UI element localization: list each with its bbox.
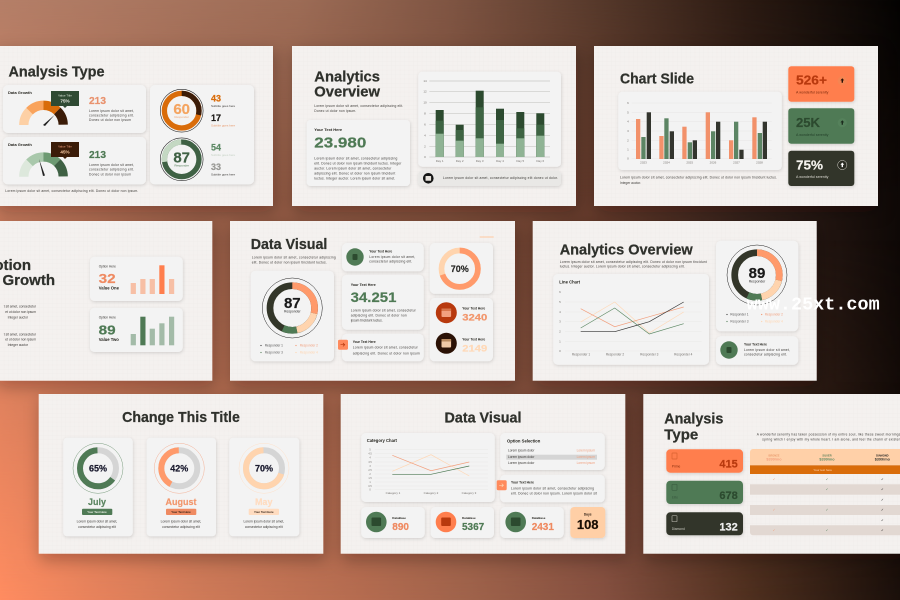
text: intro: Donec ut dolor non ipsum. bbox=[314, 109, 356, 113]
table: pricing comparison: ✓ bbox=[881, 518, 884, 522]
text: chart note bbox=[620, 176, 777, 185]
line chart: four responders: 2 bbox=[559, 330, 561, 334]
stat card: 526+: 526+ bbox=[796, 73, 827, 88]
stat card: Elite 678 bbox=[666, 481, 743, 504]
stat card: 75% bbox=[788, 151, 854, 186]
watermark: www.25xt.com: www.25xt.com bbox=[747, 296, 880, 316]
bar chart: yearly grouped bars: 2024 bbox=[663, 161, 670, 165]
card: 70% donut bbox=[430, 243, 493, 294]
card: July 65%: Your Text Here bbox=[87, 510, 107, 514]
card: option selection table: Lorem ipsum dolor bbox=[508, 461, 535, 465]
bar chart: yearly grouped bars: 2023 bbox=[640, 161, 647, 165]
text: intro: Lorem ipsum dolor sit amet, consectetur adipiscing elit. Donec ut dolor non ipsum tincidunt bbox=[560, 260, 707, 264]
table: pricing comparison: $399/mo bbox=[875, 458, 891, 462]
table: pricing comparison: ✓ bbox=[826, 508, 829, 512]
table: pricing comparison: Your text here bbox=[813, 468, 832, 472]
card: option selection table: Lorem ipsum bbox=[577, 449, 595, 453]
stat card: Diamond 132 bbox=[666, 512, 743, 535]
card: database 5367: DataBase bbox=[462, 516, 476, 520]
card: top text with person icon: consectetur adipiscing elit. bbox=[369, 260, 412, 264]
table: pricing comparison: ✓ bbox=[881, 528, 884, 532]
card: value two bars: Option Here bbox=[99, 316, 116, 320]
card: bottom text with arrow: Your Text Here bbox=[353, 340, 376, 344]
card: 87 responder donut: Responder 4 bbox=[300, 350, 318, 354]
line chart: four responders: 1 bbox=[559, 339, 561, 343]
card: gauge two: Lorem ipsum dolor sit amet, bbox=[89, 163, 134, 167]
card: value two bars: Value Two bbox=[99, 337, 119, 342]
card: responder donuts: Subtitle goes here bbox=[211, 124, 236, 128]
card: text with person icon: Your Text Here bbox=[744, 342, 767, 346]
card: database 890: DataBase bbox=[392, 516, 406, 520]
card: 23.980 stat bbox=[307, 120, 410, 186]
card: 87 responder donut: Responder bbox=[284, 310, 301, 314]
card: responder donuts: 54 bbox=[211, 143, 221, 153]
bar chart: daily stacked bars: 14 bbox=[423, 79, 427, 83]
panel: Chart Slide bbox=[594, 46, 878, 206]
card: gauge one: Data Growth bbox=[8, 90, 32, 95]
card: option selection table: Lorem ipsum bbox=[577, 455, 595, 459]
card: gauge one: 213 bbox=[89, 96, 106, 107]
text: footnote: Lorem ipsum dolor sit amet, consectetur adipiscing elit. Donec ut dolor non ipsum. bbox=[5, 189, 138, 193]
table: pricing comparison: ✓ bbox=[773, 528, 776, 532]
card: May 70%: May bbox=[255, 497, 272, 507]
callout: chart note strip: Lorem ipsum dolor sit amet, consectetur adipiscing elit donec ut dolor. bbox=[443, 176, 558, 180]
card: bottom text with arrow bbox=[338, 334, 424, 361]
card: responder donuts: 87 bbox=[173, 150, 190, 166]
title: Data Visual: Data Visual bbox=[251, 236, 327, 253]
stat card: 75%: 75% bbox=[796, 157, 823, 172]
bar chart: daily stacked bars: Day 3 bbox=[476, 159, 484, 163]
card: responder donuts: Subtitle goes here bbox=[211, 172, 236, 176]
accent line bbox=[480, 236, 494, 238]
card: May 70%: consectetur adipiscing elit bbox=[245, 525, 283, 529]
card: value one bars: Option Here bbox=[99, 265, 116, 269]
card: 70% donut: 70% bbox=[451, 264, 469, 274]
card: 34.251 stat: 34.251 bbox=[351, 290, 397, 305]
stat card: 25K: 25K bbox=[796, 115, 821, 130]
line chart: category chart: 4.5 bbox=[368, 453, 372, 456]
card: option selection table: Option Selection bbox=[507, 438, 541, 443]
card: gauge two: Data Growth bbox=[8, 142, 32, 147]
card: 89 responder donut: Responder 2 bbox=[765, 312, 783, 316]
title: Change This Title: Change This Title bbox=[122, 409, 240, 426]
line chart: category chart: 0.5 bbox=[368, 485, 372, 488]
card: database 2431 bbox=[500, 507, 564, 538]
text: description two bbox=[4, 332, 37, 347]
line chart: four responders: 3 bbox=[559, 320, 561, 324]
table: pricing comparison: ✓ bbox=[826, 488, 829, 492]
bar chart: daily stacked bars bbox=[418, 72, 561, 167]
card: 34.251 stat: adipiscing elit. Donec ut dolor non bbox=[351, 313, 407, 317]
card: text with person icon bbox=[716, 336, 798, 365]
stat card: 25K bbox=[788, 108, 854, 144]
line chart: category chart: Category 1 bbox=[386, 491, 401, 495]
bar chart: daily stacked bars: 6 bbox=[424, 123, 426, 127]
card: 34.251 stat: Your Text Here bbox=[351, 283, 376, 287]
card: database 5367 bbox=[431, 507, 494, 538]
card: 3240 and 2149 stats: 3240 bbox=[462, 312, 487, 323]
title: Analysis Type: Type bbox=[664, 426, 698, 443]
card: 3240 and 2149 stats: 2149 bbox=[462, 343, 487, 354]
card: 3240 and 2149 stats: Your Text Here bbox=[462, 337, 485, 341]
panel: Data Visual slide with category chart bbox=[341, 394, 625, 554]
card: 108 days: Days bbox=[584, 513, 592, 517]
line chart: category chart: 2 bbox=[369, 473, 371, 476]
text: intro: Lorem ipsum dolor sit amet, consectetur adipiscing bbox=[252, 256, 336, 260]
bar chart: daily stacked bars: 8 bbox=[424, 111, 426, 115]
stat card: 25K: A wonderful serenity bbox=[796, 133, 829, 137]
card: 87 responder donut: Responder 3 bbox=[265, 350, 283, 354]
line chart: category chart: 5 bbox=[369, 448, 371, 452]
table: pricing comparison: ✓ bbox=[881, 488, 884, 492]
card: 23.980 stat: luctus. Integer auctor. Lorem ipsum dolor sit amet. bbox=[314, 176, 395, 180]
card: text with person icon: Lorem ipsum dolor sit amet, bbox=[744, 348, 790, 352]
bar chart: daily stacked bars: Day 1 bbox=[436, 159, 444, 163]
bar chart: yearly grouped bars: 2 bbox=[627, 138, 629, 142]
title: Analysis Type: Analysis bbox=[664, 411, 723, 428]
line chart: category chart bbox=[361, 433, 495, 502]
table: pricing comparison: BRONZE bbox=[769, 453, 780, 457]
line chart: four responders: 4 bbox=[559, 310, 561, 314]
card: gauge one: 75% bbox=[60, 98, 70, 104]
card: 89 responder donut bbox=[716, 241, 798, 331]
panel: Change This Title slide bbox=[39, 394, 323, 554]
text: intro bbox=[252, 256, 336, 265]
panel: Analytics Overview slide with stacked bars bbox=[292, 46, 576, 206]
card: May 70%: Lorem ipsum dolor sit amet, bbox=[243, 520, 284, 524]
card: responder donuts: 60 bbox=[173, 101, 190, 118]
card: text with person icon: consectetur adipiscing elit. bbox=[744, 353, 787, 357]
card: gauge one: Value Title bbox=[58, 94, 72, 98]
card: August 42%: Your Text Here bbox=[171, 510, 191, 514]
table: pricing comparison: SILVER bbox=[822, 453, 832, 457]
card: 89 responder donut: Responder 3 bbox=[730, 320, 749, 324]
card: gauge one: Donec ut dolor non ipsum bbox=[89, 118, 131, 122]
card: July 65%: Lorem ipsum dolor sit amet, bbox=[77, 520, 117, 524]
card: May 70%: 70% bbox=[255, 464, 273, 474]
title: Analytics Overview: Analytics Overview bbox=[560, 241, 693, 258]
line chart: four responders: Line Chart bbox=[559, 280, 581, 285]
bar chart: daily stacked bars: Day 4 bbox=[496, 159, 504, 163]
text: description one: t sit amet, consectetur bbox=[4, 305, 37, 309]
bar chart: yearly grouped bars: 4 bbox=[627, 120, 629, 124]
card: 23.980 stat: Lorem ipsum dolor sit amet, consectetur adipiscing bbox=[314, 157, 397, 161]
card: text with arrow: Lorem ipsum dolor sit amet, consectetur adipiscing bbox=[511, 487, 594, 491]
card: value two bars: 89 bbox=[99, 322, 116, 337]
bar chart: yearly grouped bars: 0 bbox=[627, 157, 629, 161]
card: responder donuts bbox=[150, 85, 254, 184]
card: gauge one: consectetur adipiscing elit. bbox=[89, 114, 134, 118]
bar chart: daily stacked bars: 2 bbox=[424, 144, 426, 148]
card: gauge one bbox=[3, 85, 146, 145]
card: August 42%: August bbox=[166, 497, 196, 507]
title: Analysis Type bbox=[664, 411, 723, 443]
card: July 65%: 65% bbox=[89, 464, 107, 474]
title: Analytics Overview bbox=[314, 68, 380, 101]
card: gauge one: Lorem ipsum dolor sit amet, bbox=[89, 109, 134, 113]
card: responder donuts: Responder bbox=[174, 115, 189, 119]
card: 23.980 stat: adipiscing elit. Donec ut dolor non ipsum tincidunt bbox=[314, 171, 395, 175]
line chart: category chart: 1 bbox=[369, 481, 371, 484]
bar chart: daily stacked bars: Day 6 bbox=[536, 159, 545, 163]
card: July 65%: July bbox=[88, 497, 106, 507]
text: intro: Lorem ipsum dolor sit amet, consectetur adipiscing elit. bbox=[314, 104, 403, 108]
card: 89 responder donut: Responder 1 bbox=[730, 312, 749, 316]
text: description one: et ut dolor non ipsum bbox=[5, 310, 36, 314]
panel: Data Visual slide bbox=[230, 221, 515, 381]
card: responder donuts: 33 bbox=[211, 162, 221, 172]
card: July 65%: consectetur adipiscing elit bbox=[78, 525, 116, 529]
bar chart: daily stacked bars: 12 bbox=[423, 90, 427, 94]
line chart: four responders: 0 bbox=[559, 349, 561, 353]
card: gauge two: 213 bbox=[89, 150, 106, 161]
table: pricing comparison: ✓ bbox=[773, 508, 776, 512]
line chart: category chart: 1.5 bbox=[368, 477, 372, 480]
stat card: Prime 415: Prime bbox=[672, 464, 680, 468]
card: gauge two: Donec ut dolor non ipsum bbox=[89, 172, 131, 176]
title: Analysis Type: Analysis Type bbox=[8, 64, 104, 80]
text: description two: et ut dolor non ipsum bbox=[5, 338, 36, 342]
card: text with arrow: elit. Donec ut dolor non ipsum. Lorem ipsum dolor sit bbox=[511, 492, 597, 496]
card: top text with person icon: Lorem ipsum dolor sit amet, bbox=[369, 255, 415, 259]
table: pricing comparison: ✓ bbox=[881, 478, 884, 482]
bar chart: yearly grouped bars: 3 bbox=[627, 129, 629, 133]
line chart: four responders: 6 bbox=[559, 290, 561, 294]
card: responder donuts: Responder bbox=[174, 164, 189, 168]
card: value two bars bbox=[90, 308, 183, 352]
card: 23.980 stat: 23.980 bbox=[314, 134, 366, 151]
line chart: four responders: 5 bbox=[559, 300, 561, 304]
title: Promotion Product Growth bbox=[0, 257, 55, 289]
stat card: 526+ bbox=[788, 66, 854, 102]
card: August 42%: 42% bbox=[170, 464, 188, 474]
card: database 2431: 2431 bbox=[532, 522, 554, 533]
bar chart: daily stacked bars: 10 bbox=[423, 100, 427, 104]
card: 87 responder donut: Responder 1 bbox=[265, 344, 283, 348]
line chart: four responders: Responder 3 bbox=[640, 352, 659, 356]
card: May 70% bbox=[229, 438, 299, 536]
table: pricing comparison: DIAMOND bbox=[876, 453, 889, 457]
card: bottom text with arrow: Lorem ipsum dolor sit amet, consectetur bbox=[353, 346, 419, 350]
title: Data Visual: Data Visual bbox=[444, 410, 522, 427]
card: value one bars: 32 bbox=[99, 271, 116, 286]
text: intro: elit. Donec ut dolor non ipsum tincidunt luctus. bbox=[252, 261, 327, 265]
card: gauge two bbox=[3, 137, 146, 196]
bar chart: yearly grouped bars: 2028 bbox=[756, 161, 763, 165]
card: responder donuts: 17 bbox=[211, 113, 221, 123]
line chart: category chart: Category Chart bbox=[367, 438, 398, 443]
card: gauge two: consectetur adipiscing elit. bbox=[89, 168, 134, 172]
card: 23.980 stat: Your Text Here bbox=[314, 127, 343, 132]
line chart: category chart: 3.5 bbox=[368, 461, 372, 464]
card: 108 days: 108 bbox=[577, 517, 599, 532]
bar chart: yearly grouped bars: 5 bbox=[627, 110, 629, 114]
card: 87 responder donut: 87 bbox=[284, 295, 301, 312]
card: 34.251 stat: ipsum tincidunt luctus. bbox=[351, 318, 383, 322]
text: intro: luctus. Integer auctor. Lorem ipsum dolor sit amet, consectetur adipiscing elit. bbox=[560, 265, 685, 269]
card: 3240 and 2149 stats: Your Text Here bbox=[462, 307, 485, 311]
table: pricing comparison: ✓ bbox=[773, 478, 776, 482]
card: August 42%: consectetur adipiscing elit bbox=[162, 525, 200, 529]
line chart: four responders bbox=[553, 274, 709, 365]
panel: Analysis Type slide bbox=[0, 46, 273, 206]
card: responder donuts: Subtitle goes here bbox=[211, 153, 236, 157]
card: 87 responder donut bbox=[251, 271, 334, 361]
title: Analytics Overview: Overview bbox=[314, 84, 380, 101]
table: pricing comparison: ✓ bbox=[881, 498, 884, 502]
panel: Analysis Type slide with pricing table bbox=[643, 394, 900, 554]
bar chart: daily stacked bars: Day 5 bbox=[516, 159, 525, 163]
bar chart: yearly grouped bars: 1 bbox=[627, 148, 629, 152]
card: responder donuts: Subtitle goes here bbox=[211, 104, 236, 108]
table: pricing comparison bbox=[750, 449, 900, 535]
card: May 70%: Your Text Here bbox=[254, 510, 274, 514]
table: pricing comparison: ✓ bbox=[881, 508, 884, 512]
line chart: category chart: 0 bbox=[369, 489, 371, 492]
card: value one bars bbox=[90, 257, 183, 301]
table: pricing comparison: ✓ bbox=[826, 478, 829, 482]
card: July 65% bbox=[63, 438, 133, 536]
text: description one: Integer auctor bbox=[8, 315, 29, 319]
card: database 890 bbox=[361, 507, 425, 538]
card: text with arrow: Your Text Here bbox=[511, 481, 534, 485]
card: value one bars: Value One bbox=[99, 286, 120, 291]
stat card: 75%: A wonderful serenity bbox=[796, 175, 829, 179]
text: chart note: Lorem ipsum dolor sit amet, consectetur adipiscing elit. Donec ut dolor non ipsum tincidunt luctus. bbox=[620, 176, 777, 180]
stat card: Prime 415 bbox=[666, 449, 743, 473]
bar chart: yearly grouped bars: 2026 bbox=[710, 161, 717, 165]
bar chart: yearly grouped bars: 6 bbox=[627, 101, 629, 105]
card: database 5367: 5367 bbox=[462, 522, 485, 533]
card: top text with person icon: Your Text Here bbox=[369, 249, 392, 253]
callout: chart note strip bbox=[418, 171, 561, 186]
line chart: category chart: 4 bbox=[369, 457, 371, 460]
bar chart: yearly grouped bars bbox=[618, 92, 782, 170]
bar chart: daily stacked bars: 4 bbox=[424, 134, 426, 138]
card: database 2431: DataBase bbox=[532, 516, 546, 520]
table: pricing comparison: $399/mo bbox=[819, 458, 835, 462]
card: responder donuts: 43 bbox=[211, 94, 221, 104]
text: intro bbox=[560, 260, 707, 269]
card: 87 responder donut: Responder 2 bbox=[300, 344, 318, 348]
card: 34.251 stat bbox=[342, 275, 424, 330]
card: August 42%: Lorem ipsum dolor sit amet, bbox=[161, 520, 201, 524]
stat card: Diamond 132: Diamond bbox=[672, 527, 685, 531]
card: 3240 and 2149 stats bbox=[430, 298, 493, 361]
card: 23.980 stat: elit. Donec ut dolor non ipsum tincidunt luctus. Integer bbox=[314, 161, 402, 165]
card: option selection table: Lorem ipsum bbox=[577, 461, 595, 465]
panel: Promotion Product Growth slide bbox=[0, 221, 212, 381]
text: chart note: Integer auctor. bbox=[620, 181, 641, 185]
line chart: four responders: Responder 1 bbox=[572, 352, 590, 356]
bar chart: daily stacked bars: Day 2 bbox=[456, 159, 464, 163]
text: description one bbox=[4, 305, 37, 319]
text: description two: Integer auctor bbox=[8, 343, 29, 347]
card: 23.980 stat: auctor. Lorem ipsum dolor sit amet, consectetur bbox=[314, 166, 392, 170]
panel: Analytics Overview slide with line chart bbox=[533, 221, 817, 381]
text: intro bbox=[757, 432, 900, 442]
card: option selection table: Lorem ipsum dolor bbox=[508, 455, 535, 459]
card: option selection table bbox=[500, 433, 605, 470]
stat card: 526+: A wonderful serenity bbox=[796, 91, 829, 95]
table: pricing comparison: $399/mo bbox=[766, 458, 782, 462]
text: description two: t sit amet, consectetur bbox=[4, 332, 37, 336]
table: pricing comparison: ✓ bbox=[826, 528, 829, 532]
line chart: category chart: 3 bbox=[369, 465, 371, 468]
line chart: four responders: Responder 2 bbox=[606, 352, 624, 356]
title: Analytics Overview: Analytics bbox=[314, 68, 380, 85]
card: top text with person icon bbox=[342, 243, 424, 271]
card: 89 responder donut: Responder bbox=[749, 280, 766, 284]
card: 89 responder donut: Responder 4 bbox=[765, 320, 783, 324]
card: text with arrow bbox=[497, 475, 605, 502]
card: 108 days bbox=[570, 507, 605, 538]
stat card: Elite 678: 678 bbox=[719, 490, 738, 502]
line chart: category chart: 2.5 bbox=[368, 469, 372, 472]
stat card: Prime 415: 415 bbox=[719, 459, 738, 471]
card: option selection table: Lorem ipsum dolor bbox=[508, 449, 535, 453]
card: August 42% bbox=[147, 438, 216, 536]
card: gauge two: Value Title bbox=[58, 144, 72, 148]
line chart: category chart: Category 3 bbox=[462, 491, 477, 495]
stat card: Elite 678: Elite bbox=[672, 496, 678, 500]
card: 89 responder donut: 89 bbox=[749, 265, 765, 282]
bar chart: yearly grouped bars: 2027 bbox=[733, 161, 740, 165]
stat card: Diamond 132: 132 bbox=[719, 521, 738, 533]
card: gauge two: 45% bbox=[60, 150, 70, 154]
line chart: four responders: Responder 4 bbox=[674, 352, 693, 356]
card: database 890: 890 bbox=[392, 522, 409, 533]
card: 34.251 stat: Lorem ipsum dolor sit amet, consectetur bbox=[351, 308, 417, 312]
card: bottom text with arrow: adipiscing elit. Donec ut dolor non ipsum bbox=[353, 351, 420, 355]
bar chart: yearly grouped bars: 2025 bbox=[686, 161, 693, 165]
bar chart: daily stacked bars: 0 bbox=[424, 155, 426, 159]
line chart: category chart: Category 2 bbox=[424, 491, 439, 495]
title: Chart Slide: Chart Slide bbox=[620, 70, 694, 87]
text: intro bbox=[314, 104, 403, 113]
